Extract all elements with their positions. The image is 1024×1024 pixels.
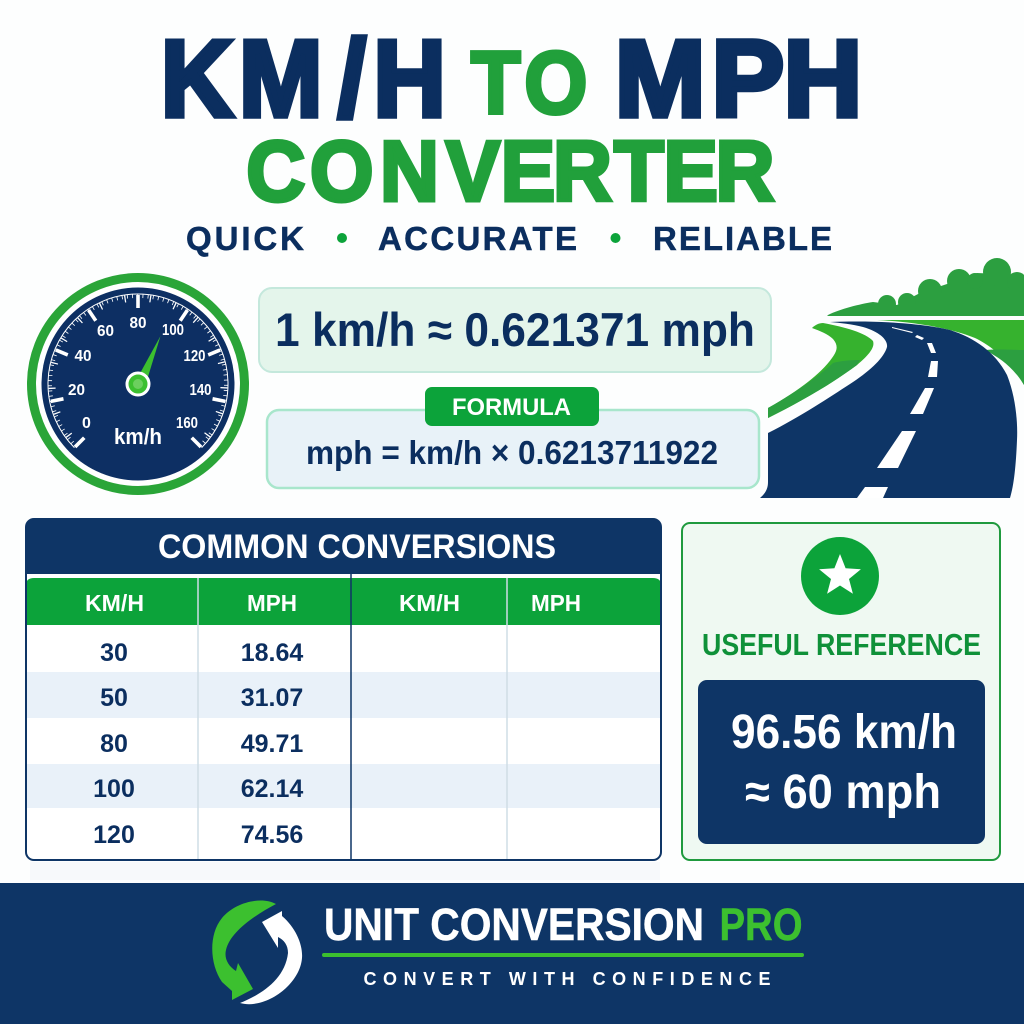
subtitle: QUICK	[186, 220, 304, 257]
panel: formula	[267, 387, 759, 488]
title: CONVERTER	[246, 124, 774, 219]
footer band: PRO	[720, 899, 802, 950]
title	[161, 18, 862, 219]
table data values: 18.64	[241, 639, 303, 667]
formula badge: FORMULA	[452, 394, 571, 421]
subtitle: ACCURATE	[378, 220, 577, 257]
illustration: winding road	[760, 258, 1024, 498]
title: KM/H	[161, 18, 446, 140]
icon: speedometer: 0	[82, 415, 91, 432]
table data values: 50	[100, 684, 128, 712]
title: MPH	[615, 18, 862, 140]
brand name: UNIT CONVERSION	[324, 899, 704, 950]
panel: conversion factor	[259, 288, 771, 372]
table heading	[26, 519, 661, 574]
table header row: KM/H	[399, 590, 460, 616]
panel: common conversions table	[26, 519, 661, 880]
icon: speedometer: 40	[74, 348, 92, 365]
table data values: 49.71	[241, 730, 303, 758]
callout: 60 mph reference	[698, 680, 985, 844]
table data values: 31.07	[241, 684, 303, 712]
icon: speedometer: 140	[190, 382, 212, 399]
icon: speedometer: 160	[176, 415, 198, 432]
table data values: 74.56	[241, 821, 303, 849]
table data values: 100	[93, 775, 135, 803]
icon: speedometer: 20	[68, 382, 85, 399]
icon: star badge	[801, 537, 879, 615]
icon: speedometer: 100	[162, 322, 184, 339]
table header row	[26, 578, 661, 625]
icon: speedometer: 60	[97, 323, 114, 340]
panel: useful reference	[682, 523, 1000, 860]
footer band	[0, 883, 1024, 1024]
title: TO	[471, 33, 587, 132]
table heading: COMMON CONVERSIONS	[158, 528, 556, 566]
table data values: 30	[100, 639, 128, 667]
icon: speedometer	[32, 278, 244, 490]
callout: 60 mph reference: 96.56 km/h	[731, 706, 957, 759]
icon: speedometer: km/h	[114, 424, 162, 449]
tagline: CONVERT WITH CONFIDENCE	[364, 969, 770, 989]
callout: 60 mph reference: ≈ 60 mph	[745, 766, 941, 819]
panel: useful reference: USEFUL REFERENCE	[702, 627, 981, 662]
icon: conversion arrows	[212, 900, 302, 1004]
table header row: KM/H	[85, 590, 144, 616]
formula badge	[425, 387, 599, 426]
table data values: 120	[93, 821, 135, 849]
table data values: 80	[100, 730, 128, 758]
table data values: 62.14	[241, 775, 303, 803]
icon: speedometer: 80	[130, 315, 147, 332]
icon: speedometer: 120	[184, 348, 206, 365]
subtitle	[186, 220, 832, 257]
panel: conversion factor: 1 km/h ≈ 0.621371 mph	[275, 303, 755, 356]
subtitle: RELIABLE	[653, 220, 832, 257]
table header row: MPH	[531, 590, 581, 616]
table data values	[93, 639, 303, 849]
tree line	[827, 258, 1024, 316]
panel: formula: mph = km/h × 0.6213711922	[306, 434, 718, 471]
table header row: MPH	[247, 590, 297, 616]
